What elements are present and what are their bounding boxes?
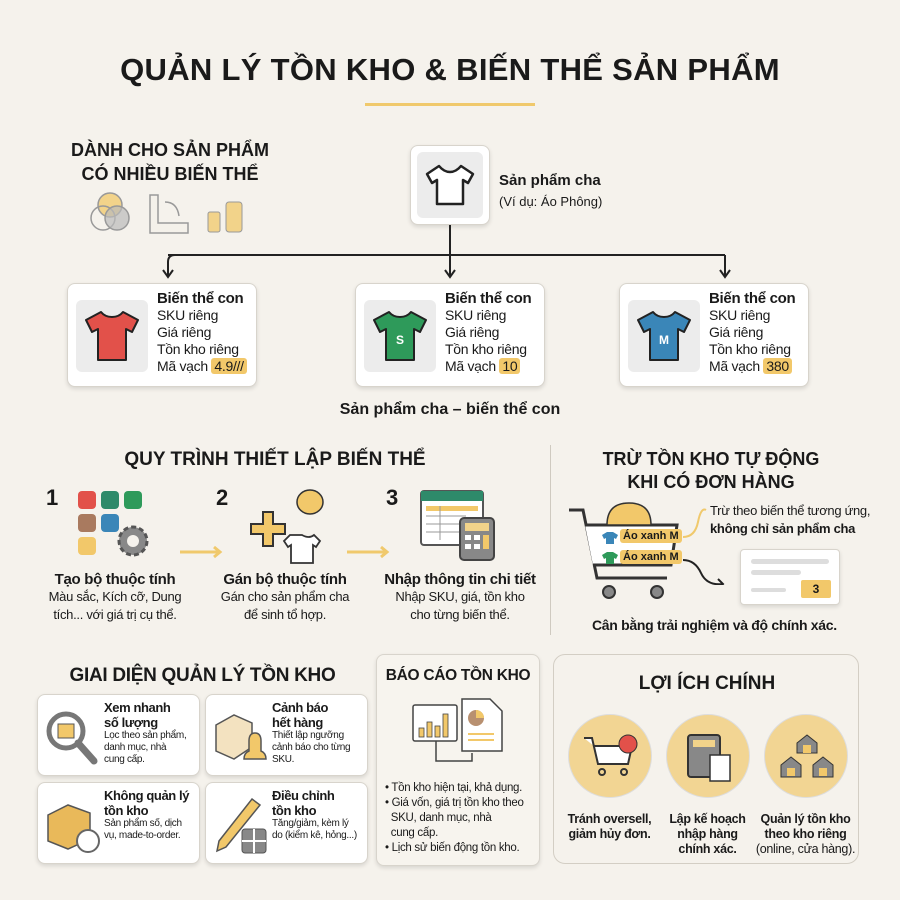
step 3: cho từng biến thể. xyxy=(410,607,510,622)
step 1: 1 xyxy=(46,485,58,510)
card: quick view: danh mục, nhà xyxy=(104,742,166,753)
step 1: Tạo bộ thuộc tính xyxy=(55,571,175,588)
heading xyxy=(602,448,819,492)
step 1: tích... với giá trị cụ thể. xyxy=(53,607,177,622)
step 3 xyxy=(384,485,536,622)
section: variant setup process xyxy=(46,448,536,622)
caption: Cân bằng trải nghiệm và độ chính xác. xyxy=(592,617,837,633)
card: quick view xyxy=(37,694,200,776)
card: no inventory tracking: Sản phẩm số, dịch xyxy=(104,818,182,829)
card: green variant: Mã vạch 10 xyxy=(445,358,517,374)
card: blue variant: Mã vạch 380 xyxy=(709,358,789,374)
title underline xyxy=(365,103,535,106)
card: stock adjustment: Điều chỉnh xyxy=(272,788,334,803)
card: green variant: Giá riêng xyxy=(445,324,499,340)
card: blue variant: SKU riêng xyxy=(709,307,770,323)
card: blue variant: M xyxy=(659,333,669,347)
section: automatic stock deduction: Áo xanh M xyxy=(623,551,679,563)
benefit: avoid overselling: giảm hủy đơn. xyxy=(568,827,651,841)
benefit: avoid overselling xyxy=(568,714,652,841)
card: green variant: SKU riêng xyxy=(445,307,506,323)
heading: for products with many variants: CÓ NHIỀU BIẾN THỂ xyxy=(81,164,258,184)
card: no inventory tracking xyxy=(37,782,200,864)
heading: LỢI ÍCH CHÍNH xyxy=(639,673,775,694)
step 3: 3 xyxy=(386,485,398,510)
tree connector arrows xyxy=(162,225,731,279)
benefit: per-warehouse stock: Quản lý tồn kho xyxy=(761,812,850,826)
card: stock adjustment: do (kiểm kê, hỏng...) xyxy=(272,830,357,841)
section: automatic stock deduction xyxy=(569,448,870,633)
card: green variant: Tồn kho riêng xyxy=(445,341,527,357)
step 2: Gán cho sản phẩm cha xyxy=(221,589,349,604)
benefit: accurate restocking: chính xác. xyxy=(678,842,737,856)
card: red variant: Mã vạch 4.9/// xyxy=(157,358,244,374)
icon: shopping cart with items xyxy=(569,502,679,599)
card: no inventory tracking: vụ, made-to-order. xyxy=(104,830,180,841)
bullet list: • Giá vốn, giá trị tồn kho theo xyxy=(385,797,524,809)
callout text: không chỉ sản phẩm cha xyxy=(710,521,855,536)
heading: KHI CÓ ĐƠN HÀNG xyxy=(627,472,795,492)
card: stock adjustment: tồn kho xyxy=(272,803,316,818)
tags: variant labels: Áo xanh M xyxy=(623,530,679,542)
benefit: per-warehouse stock: (online, cửa hàng). xyxy=(756,842,855,856)
benefit: avoid overselling: Tránh oversell, xyxy=(568,812,651,826)
benefit: accurate restocking xyxy=(666,714,750,856)
step 2: để sinh tổ hợp. xyxy=(244,607,326,622)
step 1 xyxy=(46,485,181,622)
benefit: per-warehouse stock: theo kho riêng xyxy=(765,827,846,841)
card: red variant xyxy=(67,283,257,387)
parent product label: (Ví dụ: Áo Phông) xyxy=(499,194,602,209)
card: blue variant: Giá riêng xyxy=(709,324,763,340)
bullet list: • Lịch sử biến động tồn kho. xyxy=(385,842,519,854)
heading: TRỪ TỒN KHO TỰ ĐỘNG xyxy=(603,449,819,469)
icon: report charts xyxy=(412,698,503,762)
card: red variant: Biến thể con xyxy=(157,290,243,307)
step 3: Nhập thông tin chi tiết xyxy=(384,571,536,588)
bullet list: SKU, danh mục, nhà xyxy=(391,812,492,824)
card: no inventory tracking: tồn kho xyxy=(104,803,148,818)
card: out of stock alert: cảnh báo cho từng xyxy=(272,742,350,753)
heading: BÁO CÁO TỒN KHO xyxy=(386,667,530,684)
card: quick view: cung cấp. xyxy=(104,754,145,765)
card: blue variant: Biến thể con xyxy=(709,290,795,307)
section: inventory management interface xyxy=(36,664,369,867)
caption: parent-child: Sản phẩm cha – biến thể con xyxy=(340,401,560,418)
card: quick view: Lọc theo sản phẩm, xyxy=(104,730,186,741)
card: red variant: Giá riêng xyxy=(157,324,211,340)
heading: for products with many variants: DÀNH CHO SẢN PHẨM xyxy=(71,140,269,160)
card: no inventory tracking: Không quản lý xyxy=(104,788,189,803)
card: green variant xyxy=(355,283,545,387)
stock panel: 3 xyxy=(813,582,819,596)
benefit: per-warehouse stock xyxy=(756,714,855,856)
arrow xyxy=(180,546,222,558)
benefit: accurate restocking: Lập kế hoạch xyxy=(669,812,746,826)
bullet list: cung cấp. xyxy=(391,827,438,839)
bullet list: • Tồn kho hiện tại, khả dụng. xyxy=(385,782,522,794)
heading: for products with many variants xyxy=(71,140,269,184)
child variant cards xyxy=(66,283,810,390)
title: QUẢN LÝ TỒN KHO & BIẾN THỂ SẢN PHẨM xyxy=(120,52,780,87)
card: quick view: số lượng xyxy=(104,715,158,730)
vertical divider xyxy=(550,445,551,635)
arrow xyxy=(347,546,390,558)
icons: variant attributes xyxy=(90,192,242,234)
heading: GIAI DIỆN QUẢN LÝ TỒN KHO xyxy=(70,665,335,686)
step 1: Màu sắc, Kích cỡ, Dung xyxy=(49,589,181,604)
card: out of stock alert: hết hàng xyxy=(272,715,323,730)
arrows xyxy=(683,508,724,585)
card: out of stock alert xyxy=(205,694,368,776)
panel: inventory report xyxy=(376,654,540,866)
card: stock adjustment: Tăng/giảm, kèm lý xyxy=(272,818,349,829)
bullet list xyxy=(385,782,524,854)
callout text xyxy=(710,503,870,536)
step 2 xyxy=(216,485,350,622)
card: blue variant: Tồn kho riêng xyxy=(709,341,791,357)
benefit: accurate restocking: nhập hàng xyxy=(677,827,738,841)
card: red variant: Tồn kho riêng xyxy=(157,341,239,357)
card: out of stock alert: Thiết lập ngưỡng xyxy=(272,730,344,741)
step 3: Nhập SKU, giá, tồn kho xyxy=(395,589,525,604)
card: green variant: Biến thể con xyxy=(445,290,531,307)
panel: main benefits xyxy=(553,654,859,864)
card: stock adjustment xyxy=(205,782,368,864)
card: blue variant xyxy=(619,283,809,387)
stock panel xyxy=(740,549,840,605)
step 2: Gán bộ thuộc tính xyxy=(223,571,347,588)
card: green variant: S xyxy=(396,333,404,347)
parent product label xyxy=(499,172,602,209)
card: quick view: Xem nhanh xyxy=(104,700,170,715)
heading: QUY TRÌNH THIẾT LẬP BIẾN THỂ xyxy=(124,449,426,470)
card: red variant: SKU riêng xyxy=(157,307,218,323)
step 2: 2 xyxy=(216,485,228,510)
parent product box xyxy=(410,145,490,225)
card: out of stock alert: SKU. xyxy=(272,754,294,765)
parent product label: Sản phẩm cha xyxy=(499,172,601,189)
card: out of stock alert: Cảnh báo xyxy=(272,700,328,715)
callout text: Trừ theo biến thể tương ứng, xyxy=(710,503,870,518)
